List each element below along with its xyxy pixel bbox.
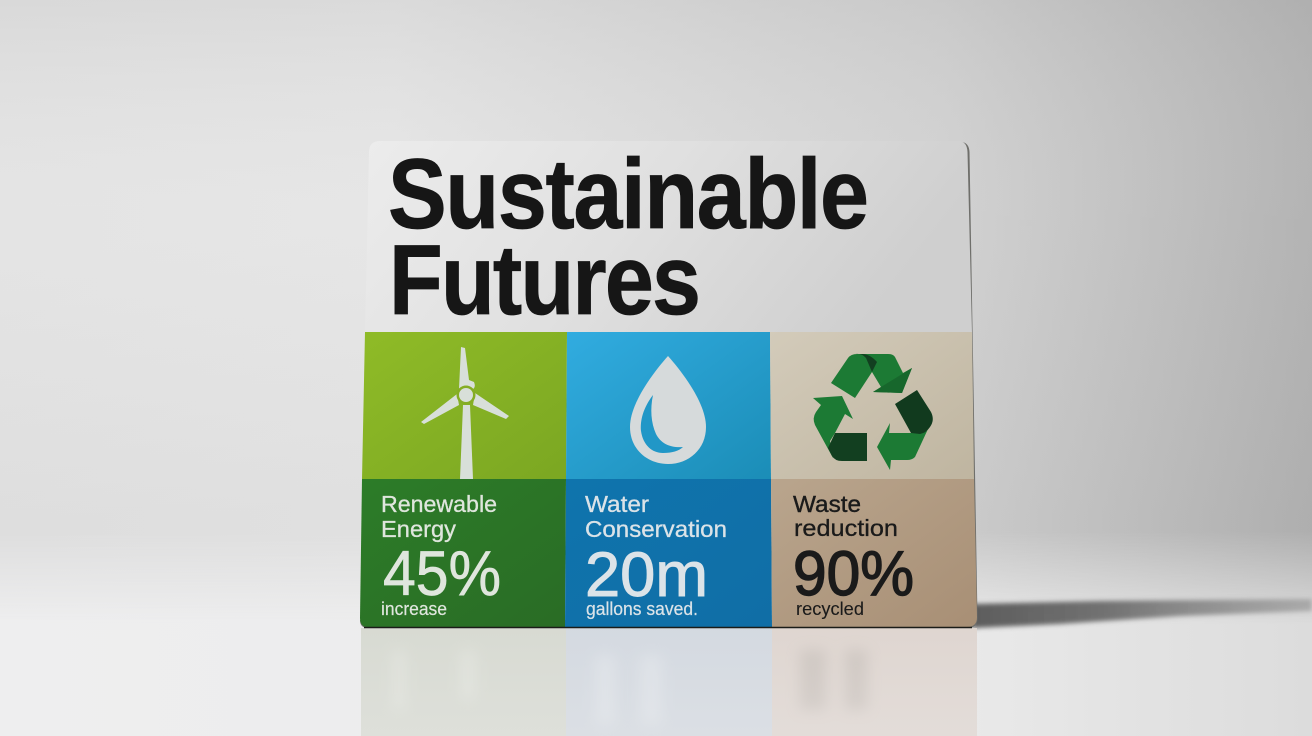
icon panel: green [362,332,567,479]
icon: wind turbine [421,347,509,479]
label: water conservation text: gallons saved. [586,599,698,619]
label: renewable energy text: 45% [383,539,501,609]
card bottom edge [364,626,972,628]
sign card [360,138,978,628]
icon: recycling arrows [813,354,933,470]
card shadow on floor [972,599,1312,628]
label: water conservation text: 20m [585,540,708,610]
panel: water conservation [565,332,772,627]
stat panel: dark green [360,479,566,627]
icon: water drop [630,356,706,464]
label: renewable energy text: increase [381,599,447,619]
label: waste reduction text: recycled [796,599,864,619]
panel: renewable energy [360,332,567,627]
label: waste reduction text: Waste [793,491,861,517]
label: renewable energy text: Renewable [381,491,497,517]
icon panel: beige [770,332,974,479]
label: water conservation text: Water [585,491,649,517]
card reflection on floor [361,628,977,736]
panel: white title area [365,141,972,333]
title: Sustainable [388,138,869,249]
card edge thickness [360,142,978,628]
panel: waste reduction [770,332,977,627]
icon panel: light blue [566,332,771,479]
label: waste reduction text [793,491,914,619]
stat panel: dark blue [565,479,772,627]
label: water conservation text: Conservation [585,516,727,542]
title: Futures [389,224,701,335]
label: water conservation text [585,491,727,619]
label: renewable energy text: Energy [381,516,457,542]
label: waste reduction text: reduction [794,515,898,541]
label: waste reduction text: 90% [793,539,914,609]
stat panel: tan [771,479,977,627]
title [388,138,869,335]
label: renewable energy text [381,491,501,619]
